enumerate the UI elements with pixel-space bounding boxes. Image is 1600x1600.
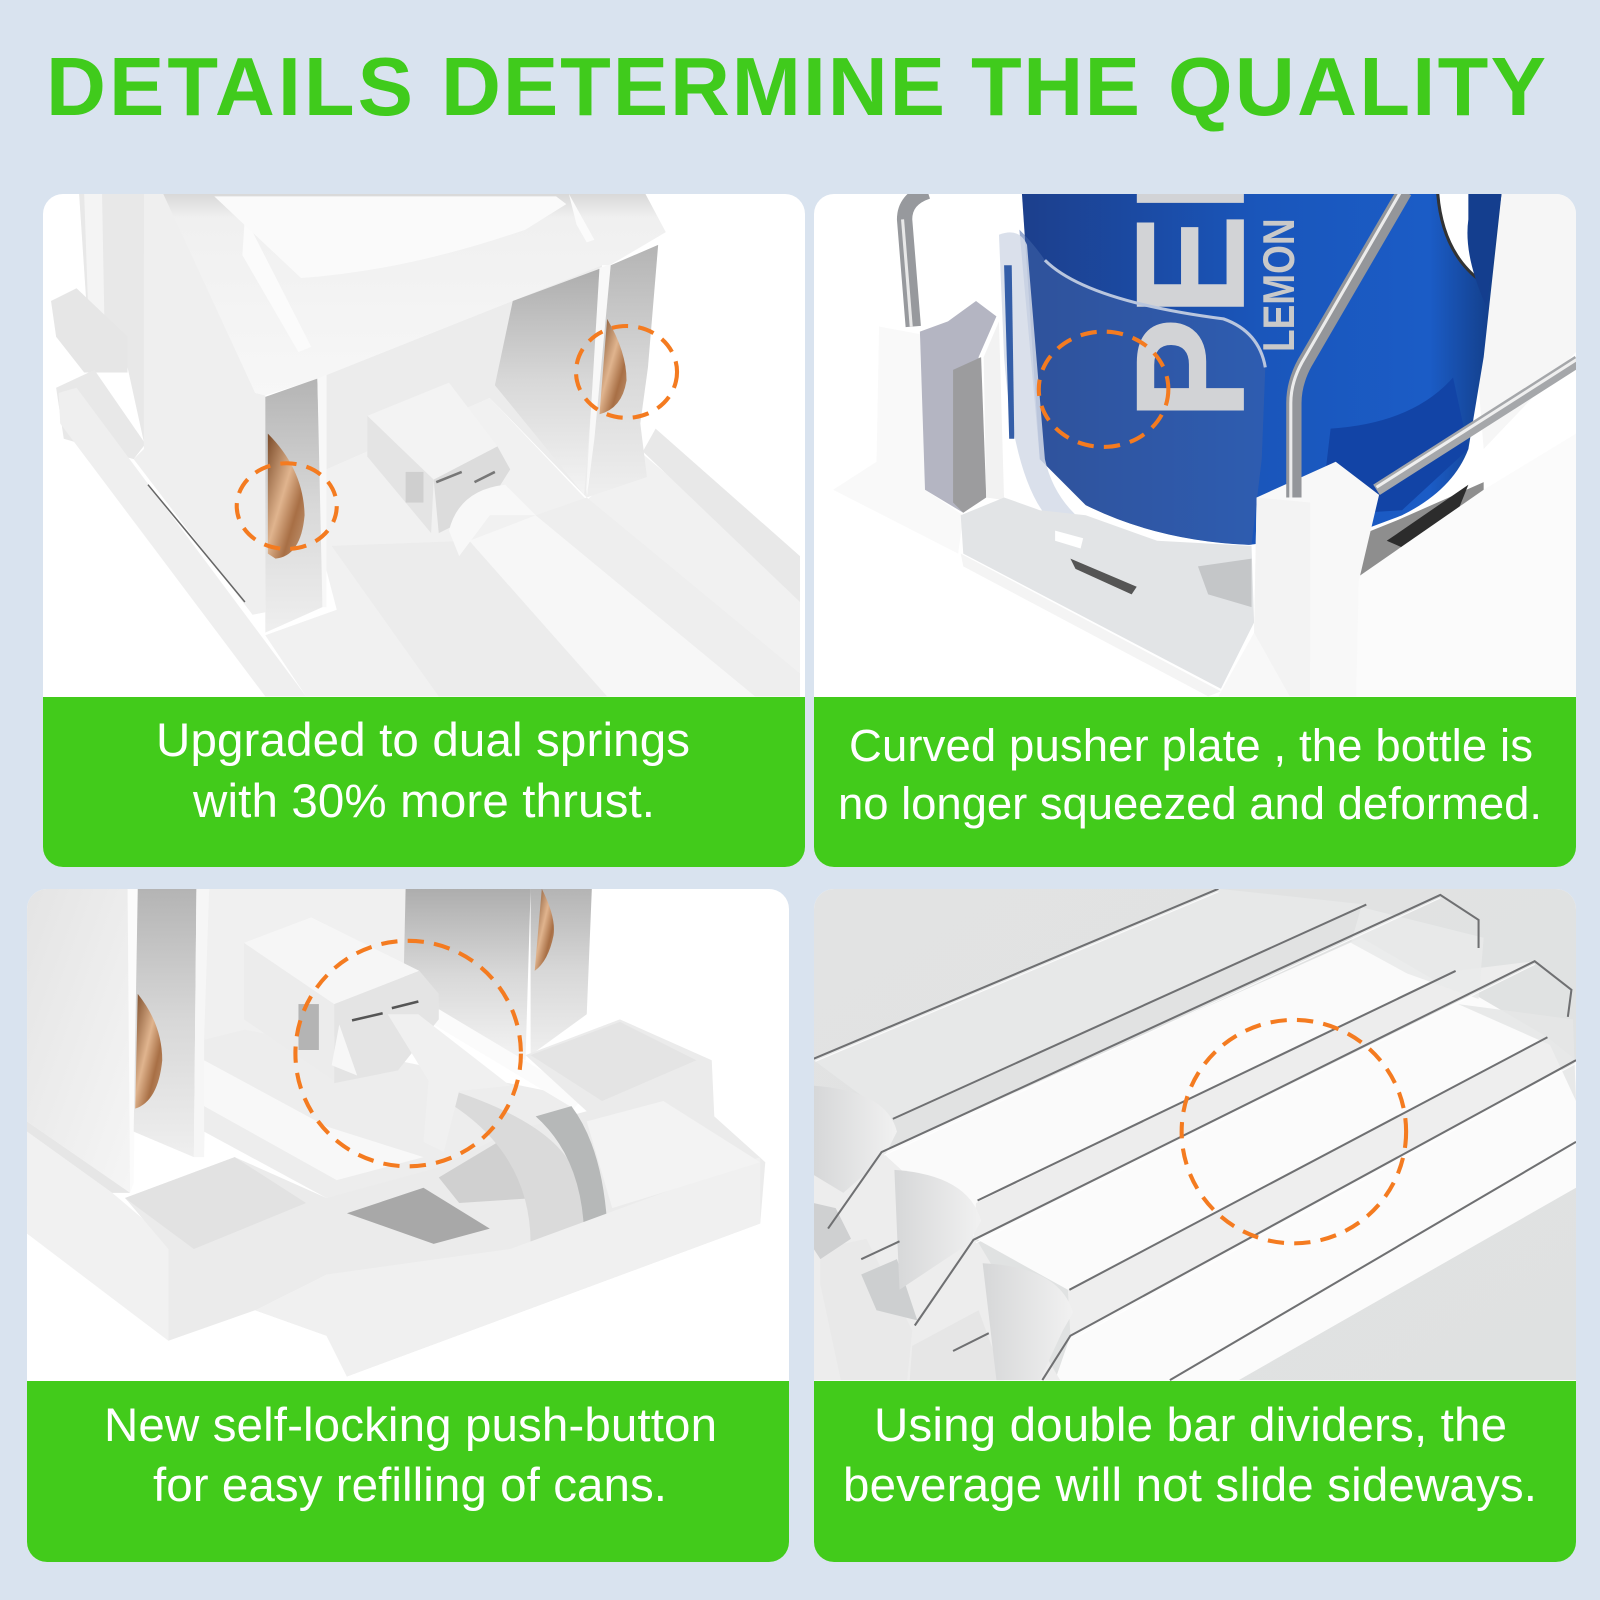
caption text: Using double bar dividers, the	[874, 1399, 1507, 1452]
wires	[814, 889, 1576, 1380]
caption text: New self-locking push-button	[104, 1399, 717, 1452]
caption bar	[43, 697, 805, 867]
caption text: with 30% more thrust.	[192, 775, 655, 828]
callout ring	[1182, 1020, 1406, 1243]
panel: double bar dividers	[814, 889, 1576, 1562]
caption bar	[814, 1381, 1576, 1562]
caption text	[838, 720, 1542, 829]
caption text: Upgraded to dual springs	[156, 714, 690, 767]
title: THE	[971, 40, 1140, 133]
domes	[814, 1086, 897, 1193]
panel 4 background	[814, 889, 1576, 1562]
title: DETAILS	[46, 40, 413, 133]
bottom left mechanism	[820, 1239, 912, 1380]
panel: dual springs	[43, 194, 805, 867]
callout rings	[237, 326, 677, 549]
title: QUALITY	[1168, 40, 1546, 133]
can lettering: PEP	[1103, 110, 1277, 421]
caption bar	[27, 1381, 789, 1562]
caption text	[104, 1399, 717, 1512]
photo: dispenser trays	[814, 889, 1576, 1380]
caption text: no longer squeezed and deformed.	[838, 778, 1542, 829]
caption text: Curved pusher plate , the bottle is	[849, 720, 1533, 771]
panel 3 background	[27, 889, 789, 1562]
callout ring	[295, 941, 521, 1166]
white upright and base left	[833, 327, 963, 554]
panel 2 background	[814, 194, 1576, 867]
panel: curved pusher plate	[814, 194, 1576, 867]
white upright right	[1359, 482, 1484, 579]
caption text	[156, 714, 690, 828]
push button	[404, 964, 419, 977]
photo: spring housing	[51, 194, 800, 696]
clear plate	[126, 1020, 766, 1340]
title: DETERMINE	[441, 40, 945, 133]
title	[46, 40, 1546, 133]
callout ring	[1039, 332, 1168, 447]
plate	[1019, 230, 1265, 545]
photo: can and pusher plate	[896, 194, 1576, 696]
caption bar	[814, 697, 1576, 867]
wires	[905, 191, 928, 327]
panel 1 background	[43, 194, 805, 867]
caption text	[843, 1399, 1537, 1512]
can sub-lettering: LEMON	[1253, 218, 1304, 352]
caption text: for easy refilling of cans.	[153, 1459, 667, 1512]
photo: push-button	[27, 889, 765, 1377]
panel: self-locking push-button	[27, 889, 789, 1562]
trays	[814, 889, 1366, 1119]
caption text: beverage will not slide sideways.	[843, 1459, 1537, 1512]
